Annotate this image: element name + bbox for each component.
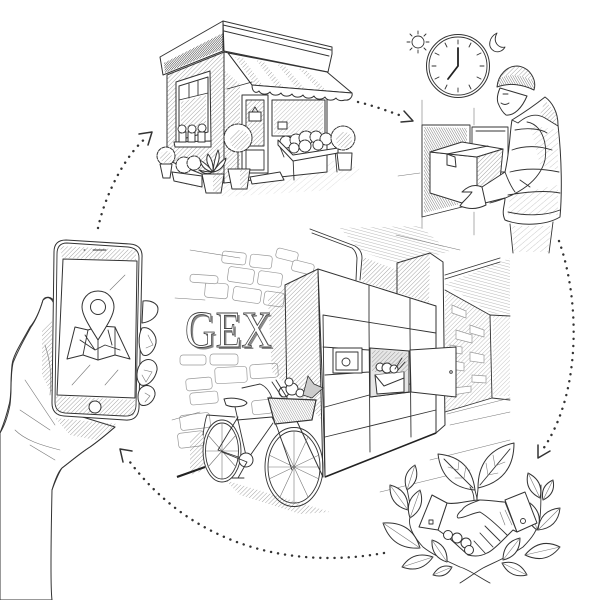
icon: sun (407, 31, 429, 53)
sprout leaves (438, 443, 514, 500)
brick wall (172, 247, 315, 477)
shop building (157, 21, 362, 197)
GEX sign: GEX (187, 304, 274, 361)
hand (0, 297, 118, 600)
vegetable crate (278, 131, 338, 180)
icon: location pin (82, 291, 114, 340)
arrow: locker to handshake (538, 241, 574, 458)
icon: map (67, 326, 130, 360)
open compartment with vegetables (370, 348, 409, 397)
clock (426, 34, 490, 98)
corridor (380, 258, 510, 492)
side window (174, 71, 211, 147)
door step (250, 172, 284, 184)
arrow: phone to shop (98, 132, 152, 228)
locker screen (333, 348, 362, 373)
bicycle (203, 376, 330, 514)
left flower pots (157, 147, 226, 193)
delivery courier at locker (396, 31, 561, 253)
arrow: shop to locker (358, 102, 413, 122)
right plant in pot (331, 126, 355, 170)
phone body (52, 240, 142, 420)
pipes and ceiling (310, 226, 450, 292)
bicycle basket with vegetables (268, 376, 323, 424)
topiary in pot (224, 124, 252, 189)
handshake (419, 492, 537, 556)
courier (460, 66, 561, 253)
handshake with laurel wreath (383, 443, 560, 583)
locker wall (396, 100, 508, 250)
door (242, 95, 268, 173)
courier head and hat (497, 66, 535, 115)
icon: moon (490, 33, 505, 52)
cardboard box (430, 142, 503, 203)
hand holding smartphone (0, 240, 158, 600)
open locker door (410, 347, 456, 397)
central scene: street with lockers (172, 226, 510, 514)
GEX sign: GEX (185, 302, 272, 359)
parcel locker tower (285, 253, 456, 477)
laurel wreath (383, 465, 560, 583)
shop window (272, 100, 325, 136)
arrow: handshake to phone (120, 449, 384, 558)
fingers (137, 301, 158, 406)
striped awning (227, 53, 352, 101)
